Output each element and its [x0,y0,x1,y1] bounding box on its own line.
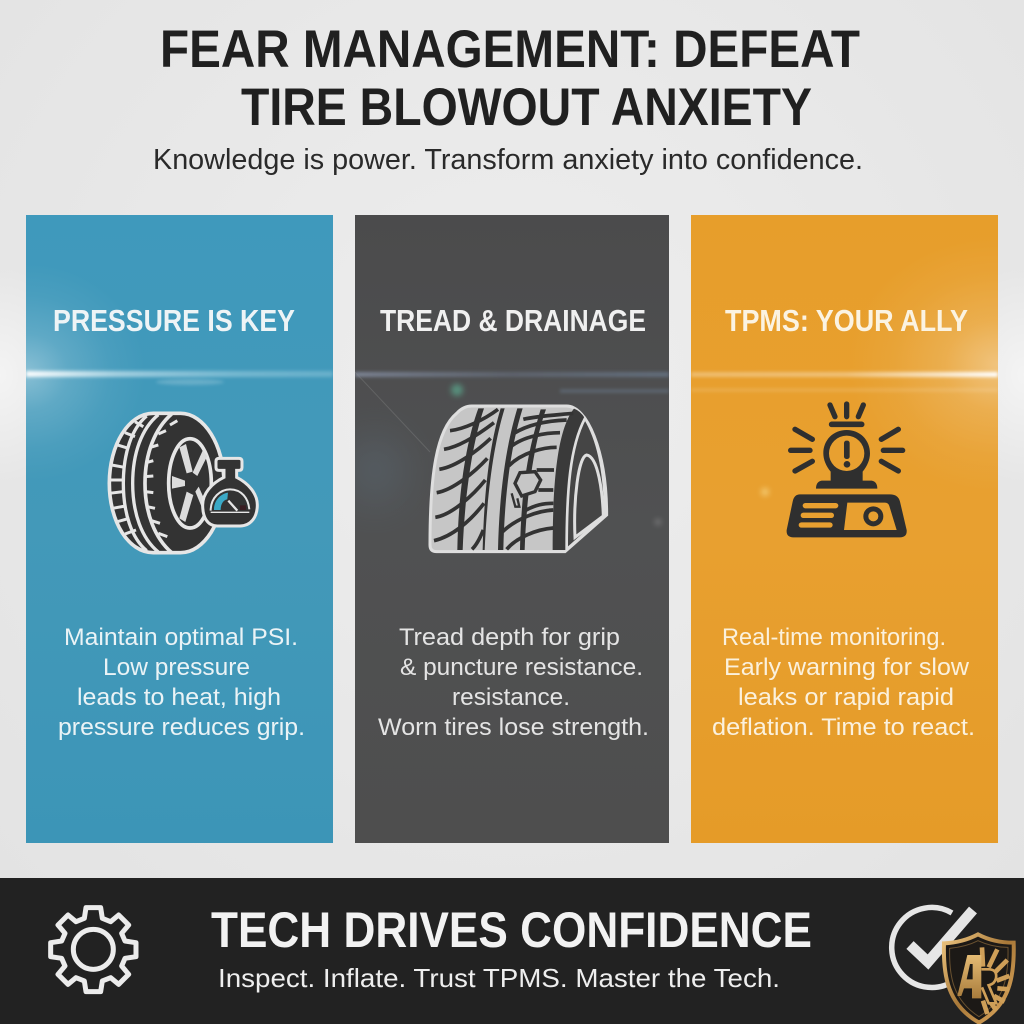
body text: tpms [712,624,975,741]
body text: tread [378,624,649,741]
title: FEAR MANAGEMENT: DEFEAT [160,20,860,79]
icon: gold shield logo [944,934,1014,1023]
heading: tpms your ally: TPMS: YOUR ALLY [725,304,968,338]
body text: pressure: Low pressure [103,654,250,681]
icon: tire with pressure gauge [109,413,257,553]
subtitle: Knowledge is power. Transform anxiety into confidence. [153,144,863,176]
heading: tread and drainage: TREAD & DRAINAGE [380,304,646,338]
title: TIRE BLOWOUT ANXIETY [241,78,812,137]
footer heading: TECH DRIVES CONFIDENCE [211,902,812,958]
body text: tpms: Real-time monitoring. [722,624,946,651]
body text: pressure [58,624,305,741]
icon: gear [51,908,136,992]
icon: check mark circle [892,907,973,987]
title [160,20,860,137]
body text: tread: & puncture resistance. [400,654,643,681]
body text: pressure: pressure reduces grip. [58,714,305,741]
icon: tpms warning light [787,404,907,537]
body text: tread: resistance. [452,684,570,711]
icon: tire tread with puncture [430,406,607,552]
body text: tread: Worn tires lose strength. [378,714,649,741]
body text: pressure: Maintain optimal PSI. [64,624,298,651]
body text: tread: Tread depth for grip [399,624,620,651]
panel: tpms your ally [691,215,1024,843]
footer tagline: Inspect. Inflate. Trust TPMS. Master the Tech. [218,963,780,993]
footer band [0,878,1024,1024]
body text: tpms: Early warning for slow [724,654,970,681]
panel: tread and drainage [347,215,669,843]
body text: pressure: leads to heat, high [77,684,281,711]
body text: tpms: deflation. Time to react. [712,714,975,741]
panel: pressure is key [0,215,333,843]
heading: pressure is key: PRESSURE IS KEY [53,304,295,338]
body text: tpms: leaks or rapid rapid [738,684,954,711]
